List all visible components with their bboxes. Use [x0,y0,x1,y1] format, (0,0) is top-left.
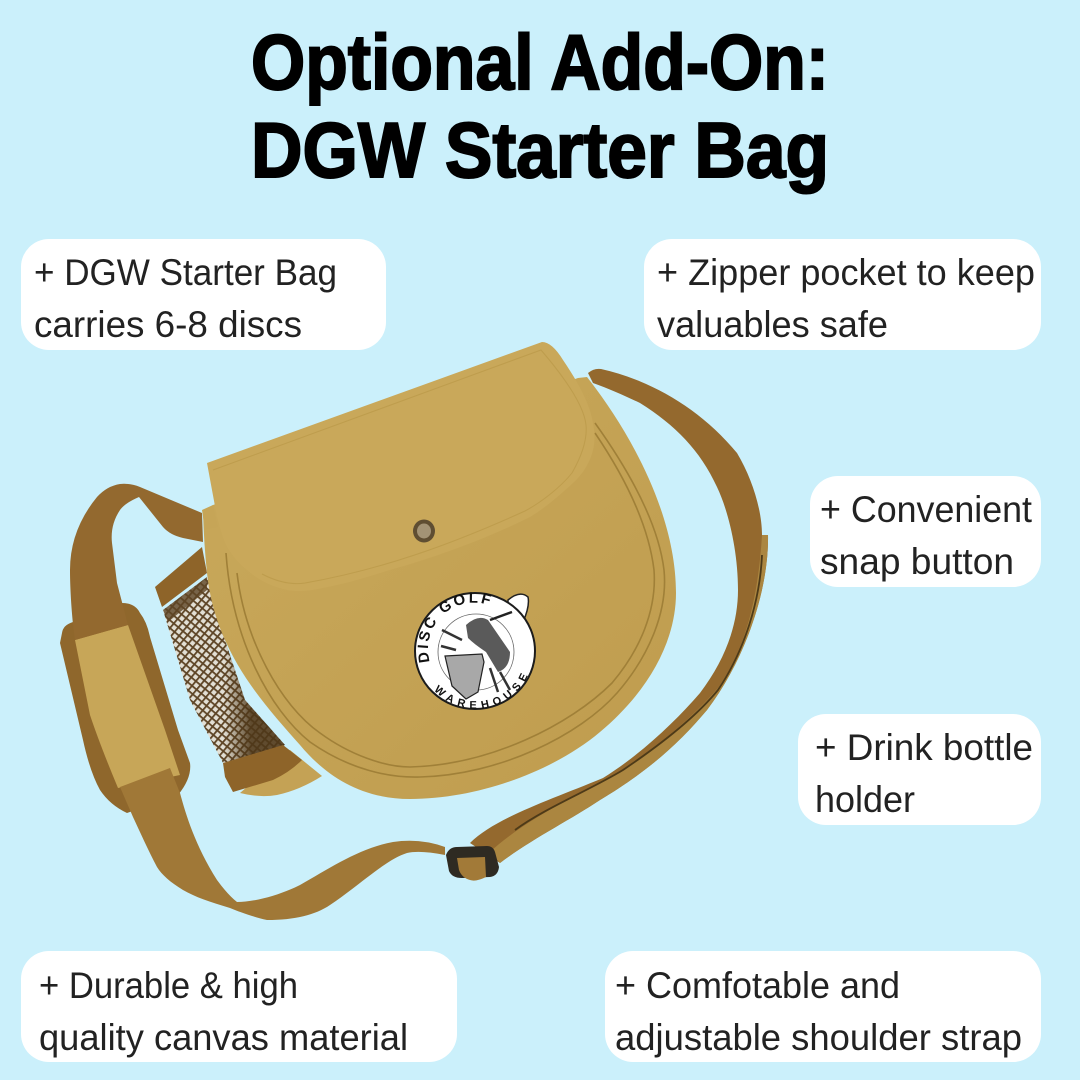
callout: drink bottle holder: holder [815,779,915,820]
logo art: skeleton and trees [466,618,510,672]
callout: canvas material [21,951,457,1062]
logo art: basket [445,654,484,699]
callout: carries 6-8 discs [21,239,386,350]
title [251,18,829,194]
callout: carries 6-8 discs: + DGW Starter Bag [34,252,337,293]
flap [207,342,594,591]
callout: canvas material: + Durable & high [39,965,298,1006]
logo badge [414,592,536,710]
callout: canvas material: quality canvas material [39,1017,408,1058]
shoulder pad [60,603,190,813]
callout: zipper pocket: valuables safe [657,304,888,345]
strap: lower loop to buckle [120,768,445,920]
callout: drink bottle holder [798,714,1041,825]
logo art: arm to disc [490,612,512,620]
illustration: starter bag [60,342,768,920]
callout: adjustable strap [605,951,1041,1062]
tab: left body top [202,505,218,530]
logo badge: WAREHOUSE [435,672,528,708]
callout: zipper pocket [644,239,1041,350]
callout: adjustable strap: adjustable shoulder strap [615,1017,1022,1058]
strap: lower folded section [490,535,768,863]
callout: drink bottle holder: + Drink bottle [815,727,1033,768]
strap: dark fold line [515,555,762,830]
icon: snap button [413,520,435,542]
callout: snap button: snap button [820,541,1014,582]
callout: adjustable strap: + Comfotable and [615,965,900,1006]
bag body [203,377,676,799]
callout: zipper pocket: + Zipper pocket to keep [657,252,1035,293]
callout: snap button: + Convenient [820,489,1033,530]
strap: left loop [70,484,203,640]
logo text: DISC GOLF [418,592,492,663]
title: Optional Add-On: [251,18,829,106]
buckle [446,846,499,881]
flap stitching [213,350,586,584]
water bottle pocket [155,547,322,796]
callout: carries 6-8 discs: carries 6-8 discs [34,304,302,345]
title: DGW Starter Bag [251,106,829,194]
body piping [226,423,665,777]
shoulder strap: right side [470,369,768,863]
callout: snap button [810,476,1041,587]
